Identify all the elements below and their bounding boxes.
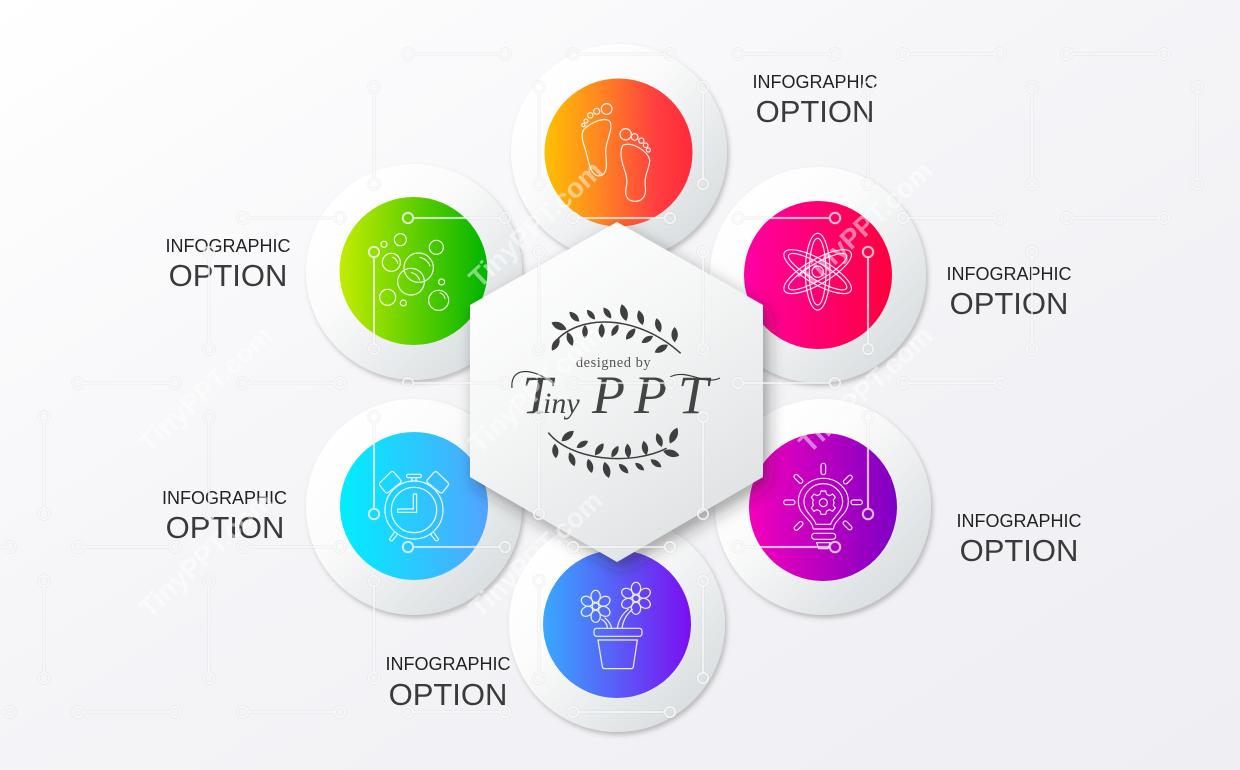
- icon: alarm clock: [379, 472, 449, 541]
- panel: central hexagon: [470, 222, 763, 562]
- logo: lower laurel: [548, 426, 681, 479]
- icon: light bulb with gear: [784, 463, 862, 549]
- logo: TinyPPT script: T: [678, 365, 712, 425]
- label: top option: INFOGRAPHIC: [752, 72, 878, 92]
- watermarks: TinyPPT.com: [463, 320, 608, 459]
- label: bottom option: INFOGRAPHIC: [385, 654, 511, 674]
- label: upper right option: [946, 264, 1072, 321]
- logo: TinyPPT script: P: [633, 365, 667, 425]
- watermarks: TinyPPT.com: [793, 320, 938, 459]
- logo: TinyPPT script: T: [522, 365, 556, 425]
- label: lower right option: INFOGRAPHIC: [956, 511, 1082, 531]
- panel: lower right option disc: [715, 399, 931, 615]
- panel: lower left option disc: [306, 399, 522, 615]
- label: upper right option: OPTION: [950, 286, 1068, 321]
- icon: flower pot: [579, 582, 652, 669]
- label: lower left option: [162, 488, 287, 545]
- label: lower right option: [956, 511, 1082, 568]
- icon: atom: [778, 233, 857, 310]
- watermarks: [133, 155, 938, 624]
- label: bottom option: OPTION: [389, 677, 507, 712]
- watermarks: TinyPPT.com: [463, 155, 608, 294]
- icon: footprints: [582, 104, 650, 201]
- label: lower left option: INFOGRAPHIC: [162, 488, 287, 508]
- watermarks: TinyPPT.com: [133, 485, 278, 624]
- label: top option: [752, 72, 878, 129]
- label: upper right option: INFOGRAPHIC: [946, 264, 1072, 284]
- label: bottom option: [385, 654, 511, 712]
- logo: TinyPPT script: [512, 365, 720, 425]
- panel: bottom option disc: [509, 516, 725, 732]
- watermarks: TinyPPT.com: [133, 320, 278, 459]
- logo: upper laurel: [549, 303, 681, 355]
- label: upper left option: OPTION: [169, 258, 287, 293]
- watermarks: TinyPPT.com: [793, 155, 938, 294]
- logo: TinyPPT script: P: [591, 365, 625, 425]
- panel: upper left option disc: [306, 164, 522, 380]
- label: lower left option: OPTION: [166, 510, 284, 545]
- watermarks: TinyPPT.com: [463, 485, 608, 624]
- panel: top option disc: [511, 44, 727, 260]
- logo: designed by TinyPPT: [512, 303, 720, 479]
- label: upper left option: INFOGRAPHIC: [165, 236, 291, 256]
- label: lower right option: OPTION: [960, 533, 1078, 568]
- panel: upper right option disc: [710, 167, 926, 383]
- label: upper left option: [165, 236, 291, 293]
- label: top option: OPTION: [756, 94, 874, 129]
- icon: bubbles: [380, 234, 449, 310]
- logo: TinyPPT script: iny: [543, 387, 580, 420]
- logo: designed by: designed by: [576, 355, 651, 371]
